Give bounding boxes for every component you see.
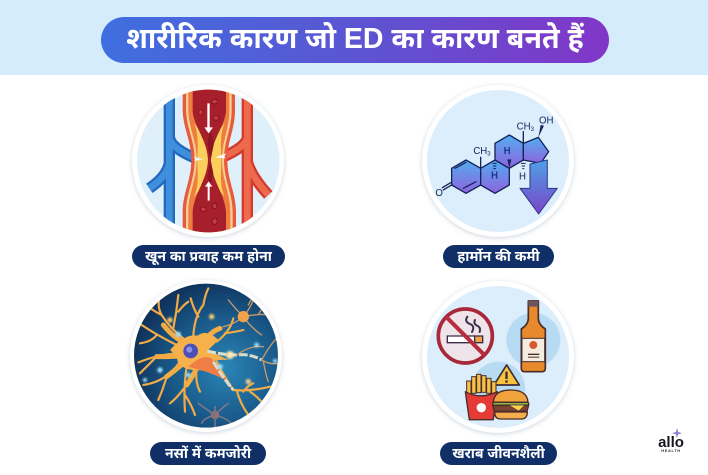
icon: blood vessels — [133, 87, 283, 237]
label: nerve weakness: नसों में कमजोरी — [165, 445, 251, 461]
title — [101, 17, 609, 63]
blood cells — [198, 99, 219, 224]
title: शारीरिक कारण जो ED का कारण बनते हैं — [126, 23, 584, 55]
icon: steroid molecule: OH — [539, 116, 553, 127]
icon: steroid molecule: O — [435, 188, 443, 199]
panel: nerve weakness — [130, 280, 283, 432]
icon: alcohol bottle — [506, 301, 560, 372]
label: hormone deficiency: हार्मोन की कमी — [457, 248, 540, 264]
panel: poor lifestyle — [422, 281, 574, 433]
icon: steroid molecule: 3 — [487, 152, 491, 158]
lumen — [193, 87, 226, 237]
icon: down arrow — [520, 160, 557, 214]
icon: steroid molecule: H — [519, 172, 526, 183]
artery wall — [183, 87, 236, 237]
icon: burger — [493, 390, 529, 419]
logo: allo health — [658, 428, 684, 453]
arrows — [193, 103, 226, 201]
axon — [207, 351, 262, 390]
icon: steroid molecule: CH — [517, 121, 531, 132]
label: poor lifestyle: खराब जीवनशैली — [452, 445, 545, 461]
icon: steroid molecule: H — [504, 146, 511, 157]
cell body — [170, 333, 228, 370]
icon: neuron — [130, 282, 283, 432]
label: reduced blood flow: खून का प्रवाह कम होना — [145, 248, 272, 264]
label: reduced blood flow — [132, 245, 285, 268]
sparks — [143, 314, 277, 384]
label: nerve weakness — [150, 442, 266, 465]
branches — [138, 288, 270, 415]
header band — [0, 0, 708, 75]
icon: steroid molecule — [435, 116, 557, 214]
panel: reduced blood flow — [132, 85, 284, 237]
neighbour neurons — [223, 295, 278, 382]
plaque — [194, 123, 208, 197]
icon: steroid molecule: H — [491, 171, 498, 182]
icon: fries — [465, 374, 497, 420]
label: poor lifestyle — [440, 442, 557, 465]
panel: hormone deficiency — [422, 85, 574, 237]
illustrations — [128, 84, 684, 452]
icon: steroid molecule: 3 — [531, 127, 535, 133]
veins — [149, 93, 268, 227]
logo: allo health: HEALTH — [661, 448, 681, 453]
icon: steroid molecule: CH — [473, 146, 487, 157]
icon: no smoking — [438, 309, 492, 363]
label: hormone deficiency — [443, 245, 554, 268]
icon: warning triangle — [494, 365, 519, 385]
logo: allo health: allo — [658, 434, 684, 451]
